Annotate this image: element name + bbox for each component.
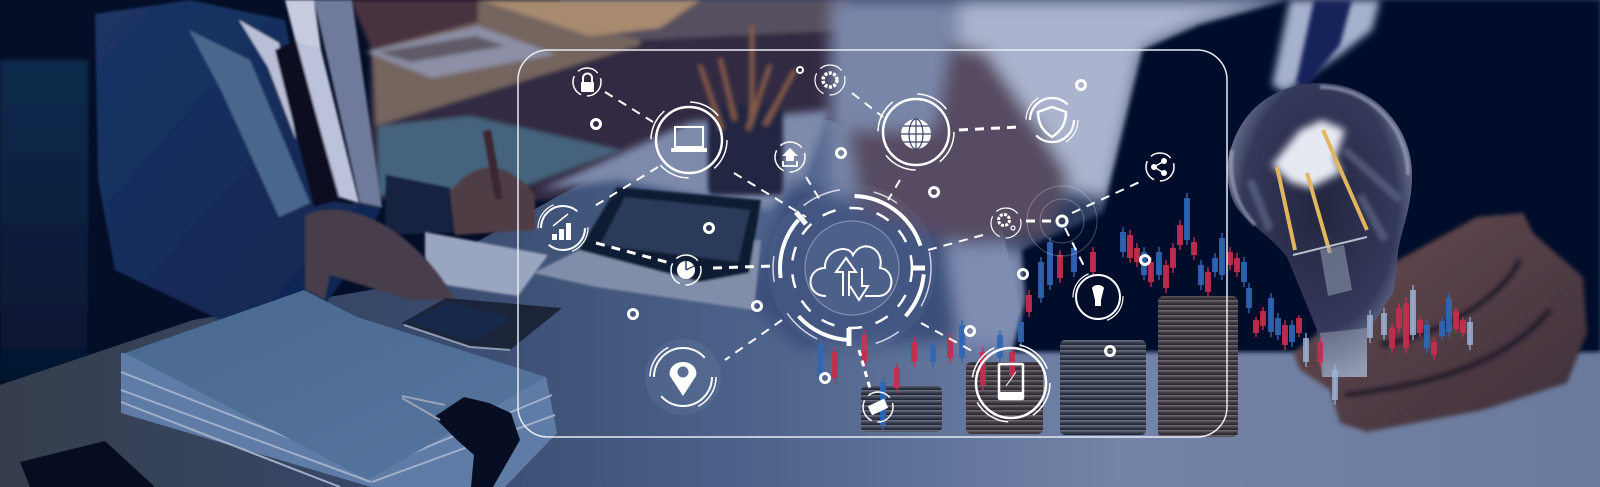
icon: share — [1146, 153, 1174, 181]
frame: rounded rectangle — [518, 50, 1227, 437]
candlestick chart overlay — [820, 193, 1470, 430]
coin stacks — [861, 296, 1238, 437]
icon: globe — [878, 94, 954, 170]
bulb filament glow — [1272, 120, 1345, 188]
filaments — [1277, 130, 1367, 253]
icon: shield — [1026, 94, 1078, 146]
pen holder — [700, 25, 795, 195]
icon: up and down arrows — [836, 258, 868, 300]
notebook — [425, 232, 548, 296]
back table with laptop — [350, 0, 850, 200]
holding hand — [1293, 213, 1587, 432]
icon: lock — [573, 68, 601, 96]
small ring nodes — [592, 67, 1150, 382]
icon: pie chart — [671, 255, 701, 285]
tablet on desk — [533, 187, 761, 310]
desk surface — [0, 120, 1600, 487]
icon: location pin — [645, 339, 721, 415]
icon: tablet device — [972, 344, 1050, 422]
central hub: cloud sync — [768, 184, 936, 352]
icon: battery — [863, 392, 893, 422]
icon: faint radar rings — [1027, 186, 1097, 256]
bulb neck and screw — [1293, 237, 1367, 377]
icon: laptop — [651, 102, 727, 178]
phone on desk — [20, 441, 155, 487]
icon: upload — [775, 142, 805, 172]
right suit — [1012, 0, 1600, 352]
calculator — [402, 298, 562, 350]
icon: light bulb small — [1073, 272, 1123, 322]
light bulb — [1227, 83, 1412, 377]
icon: gears right — [991, 208, 1021, 238]
pale candles — [1306, 285, 1470, 405]
red candles — [835, 220, 1463, 393]
icon: growth chart — [538, 203, 588, 253]
icon: cloud — [810, 246, 891, 296]
middle blurred office — [745, 0, 1295, 350]
seated person jacket and shirt — [95, 0, 535, 325]
blue candles — [820, 193, 1449, 430]
dashed connectors — [593, 92, 1144, 392]
icon: gear top — [815, 65, 845, 95]
document stack — [121, 290, 557, 487]
calculating hand — [305, 209, 462, 312]
